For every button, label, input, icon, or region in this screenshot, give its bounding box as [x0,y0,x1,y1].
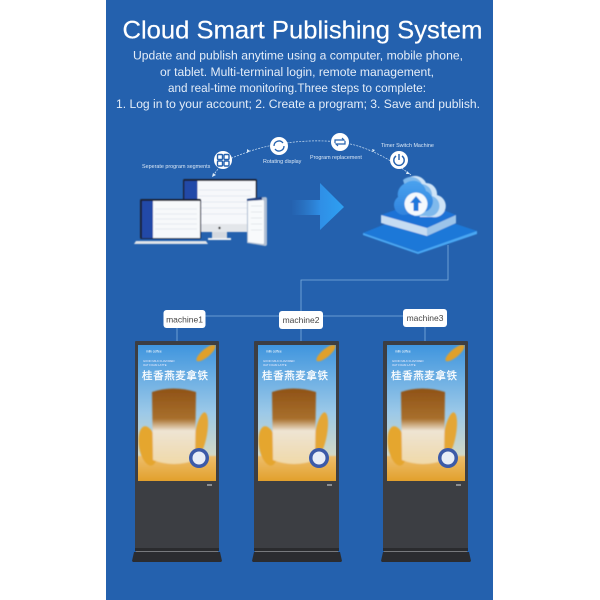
title: Cloud Smart Publishing System [122,16,482,44]
kiosk 1 [130,341,224,562]
network connector lines [177,245,448,342]
kiosk 2: 桂香燕麦拿铁 [262,369,328,382]
illustration: desktop monitor [183,179,257,240]
label: machine1 [164,310,206,328]
icon: separate segments [214,151,232,169]
kiosk 2: OAT FOAM LATTE [263,363,287,367]
label: machine1: machine1 [166,314,203,324]
kiosk 3: milk coffee [395,350,411,354]
kiosk 3: GOOD MILK FLAVORED [392,359,424,363]
icon: cloud upload [394,176,446,217]
arrow [292,183,344,230]
label: machine3 [403,309,447,327]
illustration: phone [247,197,267,246]
kiosk 1: 桂香燕麦拿铁 [142,369,208,382]
flow labels: Timer Switch Machine [381,143,434,149]
flow labels [142,143,434,170]
background panel [106,0,493,600]
illustration: laptop [134,199,208,244]
description text: Update and publish anytime using a computer, mobile phone, [133,48,463,62]
label: machine3: machine3 [407,313,444,323]
kiosk 1: milk coffee [146,350,162,354]
description text: and real-time monitoring.Three steps to complete: [168,81,426,95]
label: machine2 [279,311,323,329]
kiosk 3: OAT FOAM LATTE [392,363,416,367]
illustration: cloud platform [363,176,477,254]
kiosk 1: OAT FOAM LATTE [143,363,167,367]
dashed flow arc [212,141,411,177]
kiosk 2 [250,341,344,562]
description text: 1. Log in to your account; 2. Create a program; 3. Save and publish. [116,97,480,111]
kiosk 1: GOOD MILK FLAVORED [143,359,174,363]
icon: program replacement [331,133,349,151]
kiosk 3 [379,341,473,562]
label: machine2: machine2 [283,315,320,325]
kiosk 3: 桂香燕麦拿铁 [391,369,458,382]
description text [116,48,480,111]
flow labels: Seperate program segments [142,164,211,170]
kiosk 2: GOOD MILK FLAVORED [263,359,294,363]
description text: or tablet. Multi-terminal login, remote management, [160,65,434,79]
flow labels: Program replacement [310,155,362,161]
kiosk 2: milk coffee [266,350,282,354]
icon: power switch [390,151,408,169]
flow labels: Rotating display [263,159,302,165]
icon: rotating display [270,137,288,155]
